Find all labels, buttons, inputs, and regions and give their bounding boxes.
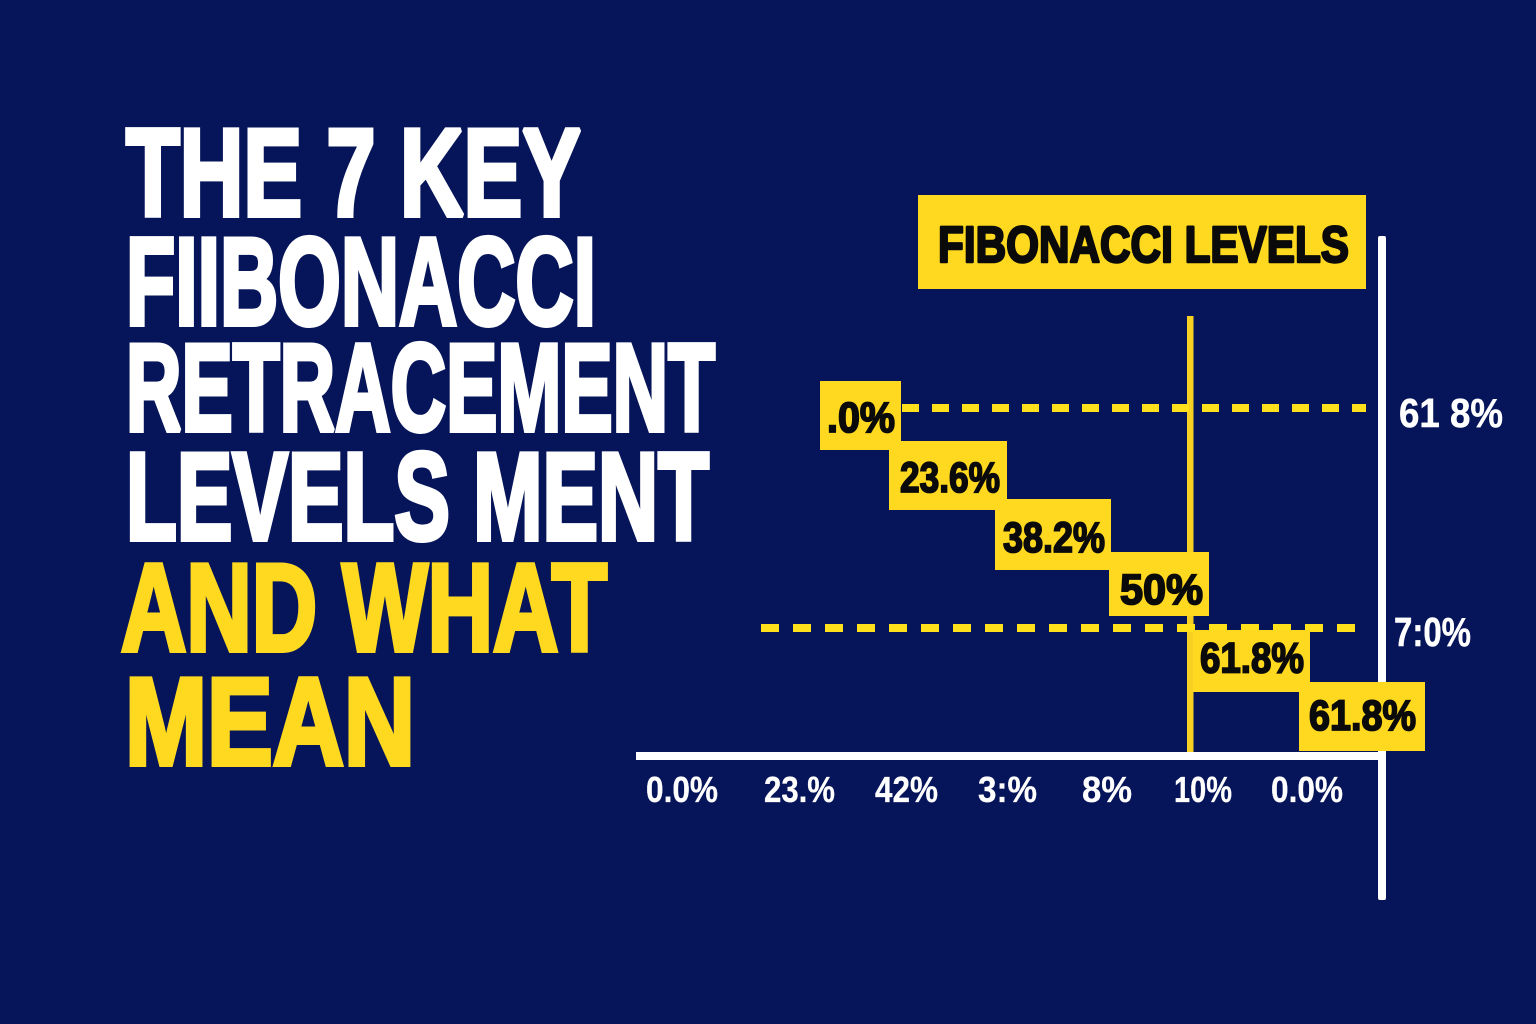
- level box: 50%: 50%: [1120, 566, 1203, 614]
- level box: 61.8% first: 61.8%: [1200, 634, 1304, 682]
- level box: 50%: [1109, 552, 1209, 616]
- level box: .0%: [820, 381, 901, 450]
- title: [121, 104, 715, 792]
- heading box: fibonacci levels: FIBONACCI LEVELS: [938, 216, 1349, 273]
- level box: 38.2%: [995, 499, 1111, 570]
- title: RETRACEMENT: [126, 320, 715, 458]
- level box: 23.6%: [889, 441, 1007, 510]
- level box: 23.6%: 23.6%: [900, 454, 1000, 502]
- x-axis labels: [646, 769, 1343, 810]
- x-axis labels: 0.0%: [1271, 769, 1343, 810]
- level box: 38.2%: 38.2%: [1003, 514, 1105, 562]
- x-axis labels: 42%: [875, 769, 938, 810]
- horizontal white axis: [636, 752, 1380, 760]
- level box: 61.8% second: [1299, 682, 1425, 751]
- dashed level line: upper: [902, 404, 1366, 412]
- x-axis labels: 8%: [1082, 769, 1132, 810]
- chart: fibonacci levels: [636, 195, 1503, 900]
- vertical white axis: [1378, 236, 1386, 900]
- dashed level line: lower: [761, 624, 1366, 632]
- x-axis labels: 10%: [1174, 769, 1232, 810]
- right label: 61 8%: 61 8%: [1399, 390, 1503, 436]
- title: MEAN: [125, 654, 415, 792]
- title: AND WHAT: [121, 540, 607, 678]
- right label: 7:0%: 7:0%: [1394, 609, 1471, 655]
- level box: 61.8% first: [1193, 630, 1310, 692]
- x-axis labels: 23.%: [764, 769, 835, 810]
- vertical yellow line: [1187, 316, 1194, 752]
- level box: 61.8% second: 61.8%: [1309, 692, 1416, 740]
- title: LEVELS MENT: [126, 428, 709, 566]
- title: FIIBONACCI: [126, 214, 596, 352]
- title: THE 7 KEY: [126, 104, 581, 242]
- heading box: fibonacci levels: [918, 195, 1366, 289]
- x-axis labels: 3:%: [978, 769, 1037, 810]
- level box: .0%: .0%: [827, 394, 895, 442]
- x-axis labels: 0.0%: [646, 769, 718, 810]
